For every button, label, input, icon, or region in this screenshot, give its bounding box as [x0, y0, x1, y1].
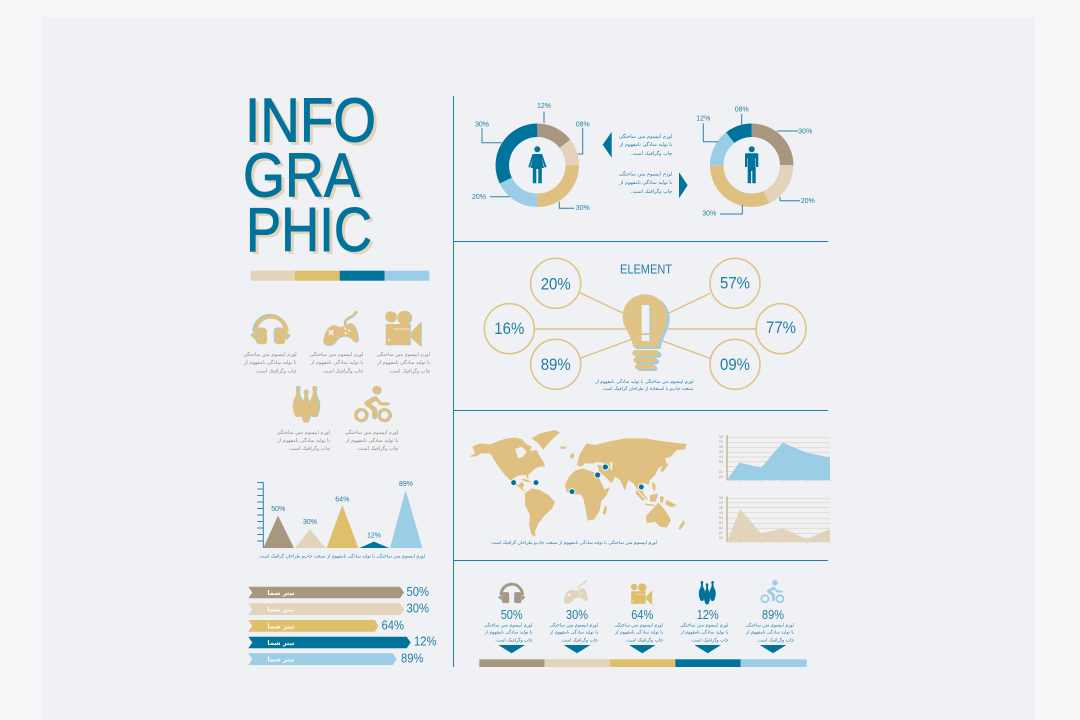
ribbon list	[248, 585, 436, 666]
stat 89%: لورم ایپسوم متن ساختگی	[745, 622, 794, 628]
stat 12%	[680, 581, 729, 653]
donut chart	[717, 130, 787, 200]
circle 57%: 57%	[720, 274, 750, 292]
area chart: tan: 01	[719, 531, 723, 535]
text block: headphones: چاپ وگرافیک است.	[255, 368, 297, 374]
donut chart	[502, 130, 572, 200]
ribbon 89: 89%	[401, 652, 424, 666]
text block: pins	[276, 429, 330, 452]
area chart: tan: 02	[719, 526, 723, 530]
stat 64%: با تولید سادگی نامفهوم از	[614, 628, 663, 636]
area chart: blue: 06	[719, 445, 723, 449]
text block: upper	[619, 133, 673, 157]
triangle labels: 50%	[271, 506, 285, 513]
ribbon 50: 50%	[406, 585, 429, 599]
stat 12%: 12%	[697, 607, 719, 622]
circle 89%: 89%	[541, 356, 571, 374]
donut labels: 30%	[798, 128, 812, 136]
circle 57%	[710, 258, 760, 308]
ribbon 12: 12%	[414, 634, 436, 648]
icon: cyclist	[356, 386, 390, 421]
stat 64%: چاپ وگرافیک است.	[625, 636, 663, 644]
stat 89%: چاپ وگرافیک است.	[756, 636, 794, 644]
area chart: blue: 07	[719, 440, 723, 444]
donut labels	[472, 103, 590, 212]
stat 89%	[745, 580, 794, 653]
area chart: blue: 00	[719, 475, 723, 479]
stat 50%: چاپ وگرافیک است.	[495, 636, 533, 644]
stat 50%	[484, 584, 533, 653]
area chart: tan: 07	[719, 501, 723, 505]
area chart: tan	[719, 496, 830, 544]
text block: pins: لورم ایپسوم متن ساختگی	[277, 429, 330, 436]
leader lines	[482, 112, 583, 208]
text block: gamepad: چاپ وگرافیک است.	[322, 368, 363, 374]
title: INFO	[245, 86, 376, 156]
ribbon 64: 64%	[382, 618, 404, 632]
donut labels: 08%	[576, 122, 590, 128]
map pins	[511, 464, 644, 495]
donut labels: 30%	[475, 122, 489, 128]
donut labels	[696, 106, 815, 218]
bottom colour bar	[479, 659, 807, 667]
connector lines	[535, 293, 757, 358]
area chart: tan: 05	[719, 511, 723, 515]
ribbon 64: تیتر شما	[267, 622, 295, 630]
text block: camera: لورم ایپسوم متن ساختگی	[377, 351, 430, 358]
circle 09%	[710, 339, 760, 389]
stat 30%	[549, 580, 598, 653]
donut labels: 30%	[702, 210, 716, 218]
title: PHIC	[246, 195, 372, 265]
circle 20%: 20%	[541, 275, 571, 293]
area chart: blue: 01	[719, 470, 723, 474]
panel: element diagram	[484, 258, 806, 392]
stat 64%: لورم ایپسوم متن ساختگی	[614, 622, 663, 628]
map caption: لورم ایپسوم متن ساختگی با تولید سادگی نامفهوم از صنعت چاپ‌و طراحان گرافیک است.	[490, 539, 657, 546]
ribbon 30	[248, 602, 429, 616]
area chart: tan: 04	[719, 516, 723, 520]
caption: صنعت چاپ‌و با استفاده از طراحان گرافیک است.	[602, 385, 694, 392]
ribbon 89	[248, 652, 424, 666]
area chart: tan: 03	[719, 521, 723, 525]
stat 30%: لورم ایپسوم متن ساختگی	[549, 622, 598, 628]
circle 20%	[531, 258, 581, 308]
text block: headphones: با تولید سادگی نامفهوم از	[243, 359, 297, 366]
section dividers	[454, 96, 828, 667]
icon: gamepad	[323, 311, 359, 346]
text block: cyclist: لورم ایپسوم متن ساختگی	[345, 429, 399, 436]
stat 64%	[614, 583, 663, 653]
text block: gamepad: با تولید سادگی نامفهوم از	[310, 359, 363, 366]
circle 16%	[484, 304, 534, 354]
caption: لورم ایپسوم متن ساختگی با تولید سادگی نامفهوم از	[594, 378, 694, 385]
donut labels: 12%	[537, 103, 551, 110]
world map	[469, 430, 687, 537]
icon: light bulb	[623, 294, 670, 371]
title colour bar	[251, 271, 429, 281]
circle 89%	[531, 339, 581, 389]
leader lines	[703, 114, 800, 214]
chart axis	[257, 482, 263, 548]
text block: lower: با تولید سادگی نامفهوم از	[619, 179, 672, 186]
text block: camera: چاپ وگرافیک است.	[389, 368, 430, 374]
donut labels: 20%	[472, 194, 486, 201]
stat 50%: با تولید سادگی نامفهوم از	[484, 628, 532, 636]
circle 09%: 09%	[720, 356, 750, 374]
text block: lower: لورم ایپسوم متن ساختگی	[619, 170, 673, 178]
circle 16%: 16%	[494, 320, 525, 338]
text block: pins: با تولید سادگی نامفهوم از	[276, 437, 330, 444]
donut labels: 20%	[801, 198, 815, 205]
chart caption: لورم ایپسوم متن ساختگی با تولید سادگی نامفهوم از صنعت چاپ‌و طراحان گرافیک است.	[258, 552, 425, 560]
text block: camera: با تولید سادگی نامفهوم از	[376, 359, 430, 366]
title: INFO	[248, 88, 379, 158]
text block: upper: لورم ایپسوم متن ساختگی	[619, 133, 673, 140]
area chart: blue: 05	[719, 450, 723, 454]
circle 77%	[756, 304, 806, 354]
donut labels: 12%	[696, 116, 710, 122]
area chart: tan: 08	[719, 496, 723, 500]
stat 30%: با تولید سادگی نامفهوم از	[549, 628, 598, 636]
text block: headphones: لورم ایپسوم متن ساختگی	[243, 351, 297, 358]
text block: headphones	[243, 351, 297, 374]
title	[243, 86, 379, 268]
stat 12%: لورم ایپسوم متن ساختگی	[680, 622, 728, 628]
text block: lower	[619, 170, 673, 195]
stat 89%: 89%	[762, 607, 784, 622]
ribbon 12	[248, 634, 436, 648]
area chart: blue: 04	[719, 455, 723, 459]
ribbon 64	[248, 618, 404, 632]
ribbon 30: تیتر شما	[267, 606, 295, 614]
area chart: blue	[719, 435, 830, 483]
map: americas	[469, 430, 567, 537]
triangle labels: 30%	[303, 519, 317, 526]
map: africa and eurasia	[565, 438, 687, 530]
heading: element: ELEMENT	[620, 262, 672, 276]
triangle labels: 89%	[399, 481, 413, 488]
text block: upper: چاپ وگرافیک است.	[631, 150, 672, 157]
title: GRA	[243, 140, 360, 210]
area chart: tan: 00	[719, 536, 723, 540]
icon: man	[745, 146, 758, 183]
text block: cyclist: با تولید سادگی نامفهوم از	[345, 437, 398, 444]
text block: cyclist	[345, 429, 399, 452]
triangle labels: 12%	[367, 532, 381, 540]
panel: bottom stats	[484, 580, 794, 653]
icon: bowling pins	[293, 386, 320, 422]
stat 12%: چاپ وگرافیک است.	[691, 636, 729, 644]
area chart: tan: 06	[719, 506, 723, 510]
icon: video camera	[385, 311, 422, 347]
panel: icon list	[243, 311, 430, 452]
stat 50%: لورم ایپسوم متن ساختگی	[484, 622, 532, 628]
text block: pins: چاپ وگرافیک است.	[289, 445, 330, 452]
triangles	[263, 490, 422, 548]
circle 77%: 77%	[766, 319, 796, 337]
stat 64%: 64%	[631, 607, 654, 622]
arrow: right	[679, 172, 688, 198]
area chart: blue: 08	[719, 435, 723, 439]
icon: headphones	[250, 316, 291, 344]
text block: upper: با تولید سادگی نامفهوم از	[619, 141, 672, 148]
title: PHIC	[249, 198, 375, 268]
stat 12%: با تولید سادگی نامفهوم از	[680, 628, 728, 636]
stat 50%: 50%	[501, 607, 523, 622]
donut labels: 30%	[576, 205, 590, 212]
stat 30%: چاپ وگرافیک است.	[560, 636, 598, 644]
stat 89%: با تولید سادگی نامفهوم از	[745, 628, 794, 636]
stat 30%: 30%	[566, 607, 588, 622]
text block: lower: چاپ وگرافیک است.	[631, 188, 672, 195]
triangle chart	[257, 481, 425, 560]
ribbon 89: تیتر شما	[267, 656, 295, 664]
title: GRA	[246, 143, 363, 213]
ribbon 50	[248, 585, 429, 599]
panel: male donut	[696, 106, 815, 218]
ribbon 12: تیتر شما	[267, 639, 295, 647]
arrow: left	[603, 132, 612, 158]
triangle labels	[271, 481, 413, 540]
ribbon 30: 30%	[406, 602, 429, 616]
caption	[594, 378, 694, 392]
text block: camera	[376, 351, 430, 374]
text block: cyclist: چاپ وگرافیک است.	[357, 445, 398, 452]
panel: female donut	[472, 103, 590, 212]
ribbon 50: تیتر شما	[267, 589, 295, 597]
area chart: blue: 03	[719, 460, 723, 464]
text block: gamepad: لورم ایپسوم متن ساختگی	[310, 351, 364, 358]
text block: gamepad	[310, 351, 364, 374]
icon: woman	[528, 146, 547, 183]
triangle labels: 64%	[335, 496, 349, 504]
donut labels: 08%	[735, 106, 749, 114]
